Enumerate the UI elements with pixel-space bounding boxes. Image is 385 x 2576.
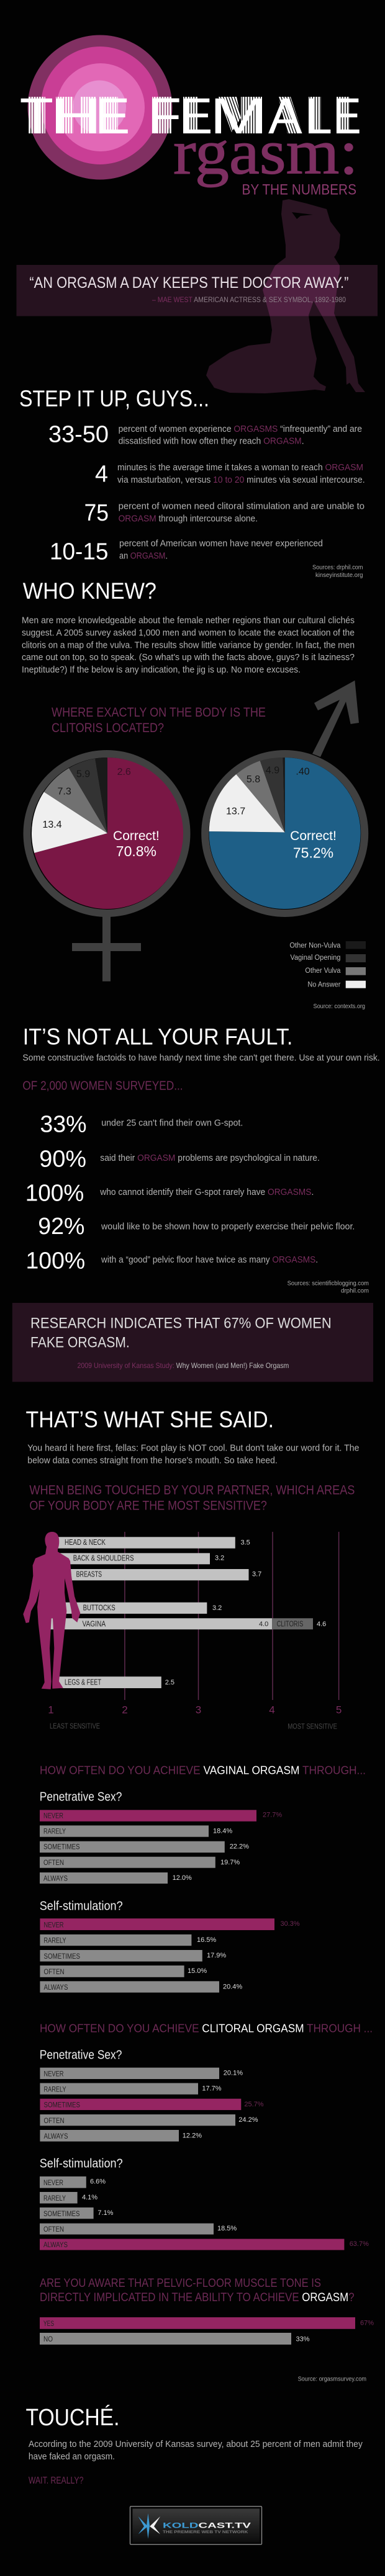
bar chart: clitoral self-stimulation: SOMETIMES xyxy=(43,2211,80,2218)
legend: pie charts: Other Non-Vulva xyxy=(289,942,341,950)
bar chart: vaginal self-stimulation: 20.4% xyxy=(223,1983,242,1990)
stat: 100 percent identify xyxy=(25,1181,314,1207)
axis numbers: 1 xyxy=(48,1704,54,1716)
bar chart: vaginal self-stimulation: 16.5% xyxy=(197,1936,216,1944)
axis captions: LEAST SENSITIVE xyxy=(50,1723,100,1730)
title: the female: A xyxy=(268,88,302,145)
bar chart: vaginal self-stimulation xyxy=(40,1900,300,1993)
paragraph: touche xyxy=(29,2440,363,2462)
bar chart: vaginal self-stimulation: NEVER xyxy=(43,1922,63,1930)
sources: fault section xyxy=(288,1280,369,1294)
heading: who knew: WHO KNEW? xyxy=(23,578,156,604)
bar chart: pelvic floor awareness: 67% xyxy=(360,2320,374,2327)
heading: sensitivity question xyxy=(29,1483,355,1513)
bar chart: pelvic floor awareness xyxy=(40,2317,374,2345)
panel: research callout: 2009 University of Kansas Study: Why Women (and Men!) Fake Orgasm xyxy=(77,1361,289,1370)
stat: 4: minutes is the average time it takes a woman to reach ORGASM xyxy=(117,463,363,473)
heading: sensitivity question: OF YOUR BODY ARE THE MOST SENSITIVE? xyxy=(29,1498,267,1513)
stat: 4: via masturbation, versus 10 to 20 minutes via sexual intercourse. xyxy=(117,475,365,485)
bar chart: clitoral penetrative: 12.2% xyxy=(183,2132,202,2139)
bar chart: pelvic floor awareness: YES xyxy=(43,2320,54,2328)
bar chart: clitoral penetrative: 24.2% xyxy=(238,2116,258,2124)
subtitle: by the numbers: BY THE NUMBERS xyxy=(242,181,356,199)
pie chart: men xyxy=(205,681,365,913)
paragraph: she said: You heard it here first, fellas: Foot play is NOT cool. But don't take our word for it. The xyxy=(27,1443,360,1453)
title: the female: E xyxy=(95,88,130,145)
panel: research callout xyxy=(12,1303,373,1382)
bar chart: clitoral self-stimulation: 7.1% xyxy=(97,2209,114,2217)
bar chart: vaginal penetrative: ALWAYS xyxy=(43,1875,68,1882)
bar chart: vaginal penetrative: 12.0% xyxy=(173,1874,192,1882)
bar chart: clitoral penetrative: OFTEN xyxy=(43,2118,65,2125)
bar chart: pelvic floor awareness: NO xyxy=(43,2336,53,2343)
bar chart: body sensitivity: CLITORIS xyxy=(277,1620,303,1629)
stat: 100 percent identify: 100% xyxy=(25,1181,84,1207)
heading: clitoral orgasm: HOW OFTEN DO YOU ACHIEVE CLITORAL ORGASM THROUGH ... xyxy=(40,2021,373,2035)
bar chart: clitoral self-stimulation: 4.1% xyxy=(82,2194,97,2201)
stat: 10-15: an ORGASM. xyxy=(119,552,168,561)
title: the female: T xyxy=(20,88,53,145)
title: the female: H xyxy=(50,88,102,145)
panel: research callout: FAKE ORGASM. xyxy=(30,1335,130,1351)
logo: koldcast tv: KOLD CAST.TV xyxy=(163,2521,251,2530)
sources: fault section: Sources: scientificblogging.com xyxy=(288,1280,369,1287)
stat: 92 percent: 92% xyxy=(38,1214,84,1240)
bar chart: clitoral penetrative: 25.7% xyxy=(244,2101,264,2108)
bar chart: vaginal penetrative: Penetrative Sex? xyxy=(40,1791,122,1804)
bar chart: vaginal penetrative: SOMETIMES xyxy=(43,1844,80,1851)
bar chart: clitoral penetrative: SOMETIMES xyxy=(43,2102,80,2109)
bar chart: body sensitivity: 3.5 xyxy=(241,1539,250,1546)
logo: koldcast tv: THE PREMIERE WEB TV NETWORK xyxy=(163,2531,248,2534)
title: the female: M xyxy=(210,88,268,145)
stat: 75: ORGASM through intercourse alone. xyxy=(119,514,258,524)
bar chart: body sensitivity: VAGINA xyxy=(82,1620,106,1629)
heading: pelvic floor question xyxy=(40,2277,355,2304)
bar chart: vaginal penetrative: 18.4% xyxy=(213,1827,232,1835)
stat: 100 percent identify: who cannot identify their G-spot rarely have ORGASMS. xyxy=(99,1187,314,1197)
pie chart: women: 5.9 xyxy=(76,769,90,780)
bar chart: clitoral penetrative: 17.7% xyxy=(202,2085,222,2093)
stat: 33-50: percent of women experience ORGASMS “infrequently” and are xyxy=(119,424,362,434)
axis numbers: 4 xyxy=(269,1704,275,1716)
legend: pie charts xyxy=(289,941,366,989)
bar chart: body sensitivity: 2.5 xyxy=(165,1679,174,1686)
stat: 10-15: 10-15 xyxy=(50,539,108,565)
bar chart: vaginal penetrative: 27.7% xyxy=(263,1811,282,1818)
bar chart: clitoral penetrative: 20.1% xyxy=(224,2069,243,2077)
stat: 10-15 xyxy=(50,539,323,565)
bar chart: vaginal self-stimulation: SOMETIMES xyxy=(43,1953,80,1961)
pie chart: women: Correct! xyxy=(113,829,160,843)
stat: 75: percent of women need clitoral stimulation and are unable to xyxy=(119,502,365,512)
bar chart: clitoral self-stimulation: 63.7% xyxy=(350,2240,369,2248)
heading: clitoris location question: WHERE EXACTLY ON THE BODY IS THE xyxy=(52,705,266,720)
bar chart: body sensitivity: LEGS & FEET xyxy=(65,1678,101,1687)
heading: not all your fault: IT’S NOT ALL YOUR FAULT. xyxy=(23,1024,292,1049)
panel: quote xyxy=(16,265,378,316)
pie chart: men: 5.8 xyxy=(247,774,260,785)
source: orgasm survey: Source: orgasmsurvey.com xyxy=(298,2375,366,2382)
title: the female: E xyxy=(179,88,212,145)
axis captions: MOST SENSITIVE xyxy=(288,1724,337,1731)
pie chart: women: 70.8% xyxy=(116,843,156,859)
axis numbers: 5 xyxy=(336,1704,342,1716)
bar chart: pelvic floor awareness: 33% xyxy=(296,2335,310,2343)
stat: 33-50 xyxy=(48,422,362,448)
stat: 33 percent: 33% xyxy=(40,1111,87,1137)
bar chart: body sensitivity xyxy=(23,1532,342,1731)
icon: concentric circles xyxy=(27,35,173,180)
bar chart: clitoral penetrative: Penetrative Sex? xyxy=(40,2048,122,2062)
axis numbers: 3 xyxy=(196,1704,201,1716)
bar chart: clitoral self-stimulation: 18.5% xyxy=(217,2225,237,2232)
bar chart: vaginal penetrative xyxy=(40,1791,282,1884)
bar chart: clitoral penetrative: RARELY xyxy=(43,2086,66,2093)
subheading: of 2000 women: OF 2,000 WOMEN SURVEYED... xyxy=(22,1080,183,1093)
bar chart: clitoral self-stimulation: RARELY xyxy=(43,2195,66,2203)
bar chart: vaginal self-stimulation: OFTEN xyxy=(43,1969,65,1976)
panel: research callout: RESEARCH INDICATES THAT 67% OF WOMEN xyxy=(30,1315,332,1332)
bar chart: vaginal self-stimulation: RARELY xyxy=(43,1938,66,1945)
stat: 4 xyxy=(95,462,365,488)
bar chart: clitoral self-stimulation xyxy=(40,2157,369,2250)
heading: clitoris location question xyxy=(52,705,266,735)
heading: pelvic floor question: ARE YOU AWARE THAT PELVIC-FLOOR MUSCLE TONE IS xyxy=(40,2277,321,2290)
pie chart: women: 7.3 xyxy=(57,787,71,797)
bar chart: body sensitivity: BREASTS xyxy=(76,1570,102,1579)
stat: 33-50: 33-50 xyxy=(48,422,109,448)
paragraph: touche: have faked an orgasm. xyxy=(29,2452,115,2462)
bar chart: body sensitivity: 3.7 xyxy=(252,1571,261,1578)
bar chart: body sensitivity: HEAD & NECK xyxy=(65,1538,106,1547)
bar chart: clitoral self-stimulation: OFTEN xyxy=(43,2226,64,2234)
stat: 75: 75 xyxy=(84,500,109,526)
sources: step it up: kinseyinstitute.org xyxy=(315,571,363,579)
axis numbers: 2 xyxy=(122,1704,128,1716)
heading: step it up: STEP IT UP, GUYS... xyxy=(19,386,209,411)
stat: 75 xyxy=(84,500,365,526)
bar chart: vaginal penetrative: 22.2% xyxy=(230,1843,249,1850)
bar chart: vaginal self-stimulation: ALWAYS xyxy=(43,1984,68,1992)
paragraph: she said: below data comes straight from the horse's mouth. So take heed. xyxy=(27,1456,278,1465)
bar chart: vaginal self-stimulation: 30.3% xyxy=(281,1920,300,1928)
heading: touche: TOUCHÉ. xyxy=(26,2404,119,2431)
logo: koldcast tv xyxy=(130,2507,262,2544)
bar chart: vaginal penetrative: 19.7% xyxy=(220,1859,240,1866)
stat: 90 percent: 90% xyxy=(39,1147,86,1173)
stat: 33 percent xyxy=(40,1111,243,1137)
heading: clitoris location question: CLITORIS LOCATED? xyxy=(52,721,164,735)
intro text: factoids: Some constructive factoids to have handy next time she can't get there. Use at your own risk. xyxy=(22,1053,380,1063)
bar chart: clitoral penetrative xyxy=(40,2048,264,2142)
bar chart: clitoral penetrative: ALWAYS xyxy=(43,2133,68,2140)
source: contexts: Source: contexts.org xyxy=(313,1003,365,1010)
stat: 10-15: percent of American women have never experienced xyxy=(119,539,323,549)
stat: 4: 4 xyxy=(95,462,108,488)
pie chart: men: Correct! xyxy=(290,829,337,843)
heading: vaginal orgasm: HOW OFTEN DO YOU ACHIEVE VAGINAL ORGASM THROUGH... xyxy=(40,1763,366,1776)
pie chart: men: 75.2% xyxy=(293,845,333,861)
paragraph: who knew: Men are more knowledgeable about the female nether regions than our cultural clichés xyxy=(22,615,355,625)
pie chart: women: 13.4 xyxy=(42,820,62,830)
stat: 92 percent xyxy=(38,1214,355,1240)
title: the female: E xyxy=(333,88,361,145)
title: the female xyxy=(20,88,361,145)
bar chart: body sensitivity: 3.2 xyxy=(215,1555,224,1562)
pie chart: men: 13.7 xyxy=(226,807,245,817)
paragraph: touche: According to the 2009 University of Kansas survey, about 25 percent of men admit they xyxy=(29,2440,363,2449)
sources: step it up xyxy=(312,564,363,579)
stat: 90 percent xyxy=(39,1147,320,1173)
pie chart: women: 2.6 xyxy=(117,767,131,777)
title: the female: F xyxy=(148,88,181,145)
stat: 92 percent: would like to be shown how to properly exercise their pelvic floor. xyxy=(101,1222,355,1232)
bar chart: vaginal penetrative: NEVER xyxy=(43,1813,63,1820)
bar chart: clitoral self-stimulation: ALWAYS xyxy=(43,2242,68,2249)
stat: 100 percent pelvic floor: 100% xyxy=(26,1248,85,1274)
stat: 33-50: dissatisfied with how often they reach ORGASM. xyxy=(119,437,304,447)
legend: pie charts: Vaginal Opening xyxy=(290,954,340,962)
bar chart: clitoral self-stimulation: 6.6% xyxy=(90,2178,106,2186)
title: the female: L xyxy=(305,88,332,145)
bar chart: clitoral penetrative: NEVER xyxy=(43,2071,63,2078)
quote text: “AN ORGASM A DAY KEEPS THE DOCTOR AWAY.” xyxy=(29,274,348,292)
paragraph: she said xyxy=(27,1443,360,1465)
bar chart: clitoral self-stimulation: NEVER xyxy=(43,2180,63,2187)
paragraph: who knew: Ineptitude?) If the below is any indication, the jig is up. No more excuses. xyxy=(22,665,301,675)
legend: pie charts: Other Vulva xyxy=(305,967,341,975)
axis numbers xyxy=(48,1704,342,1716)
legend: pie charts: No Answer xyxy=(307,982,341,989)
stat: 90 percent: said their ORGASM problems are psychological in nature. xyxy=(100,1153,320,1163)
quote attribution: – MAE WEST AMERICAN ACTRESS & SEX SYMBOL, 1892-1980 xyxy=(152,295,346,304)
bar chart: body sensitivity: BACK & SHOULDERS xyxy=(73,1554,134,1563)
paragraph: who knew xyxy=(22,615,355,675)
bar chart: vaginal self-stimulation: Self-stimulation? xyxy=(40,1900,123,1913)
paragraph: who knew: clitoris on a map of the vulva. The results show little variance by gender. In fact, the men xyxy=(22,640,355,650)
bar chart: body sensitivity: BUTTOCKS xyxy=(83,1604,116,1612)
bar chart: body sensitivity: 3.2 xyxy=(212,1604,222,1612)
icon: kneeling woman silhouette xyxy=(206,199,365,393)
paragraph: who knew: came out on top, so to speak. (So what's up with the facts above, guys? Is it laziness? xyxy=(22,653,355,663)
bar chart: vaginal self-stimulation: 17.9% xyxy=(207,1952,226,1959)
stat: 100 percent pelvic floor: with a “good” pelvic floor have twice as many ORGASMS. xyxy=(101,1255,318,1265)
sources: step it up: Sources: drphil.com xyxy=(312,564,363,571)
axis captions xyxy=(50,1723,337,1731)
title: rgasm: rgasm: xyxy=(173,117,358,187)
callout: wait really: WAIT. REALLY? xyxy=(29,2475,84,2486)
icon: female body silhouette xyxy=(23,1532,80,1689)
bar chart: clitoral self-stimulation: Self-stimulation? xyxy=(40,2157,123,2171)
pie chart: men: .40 xyxy=(296,766,310,777)
bar chart: body sensitivity: 4.0 xyxy=(259,1621,268,1628)
bar chart: body sensitivity: 4.6 xyxy=(317,1621,326,1628)
heading: pelvic floor question: DIRECTLY IMPLICATED IN THE ABILITY TO ACHIEVE ORGASM? xyxy=(40,2291,355,2304)
sources: fault section: drphil.com xyxy=(341,1287,369,1294)
paragraph: who knew: suggest. A 2005 survey asked 1,000 men and women to locate the exact location of the xyxy=(22,628,355,638)
pie chart: men: 4.9 xyxy=(266,766,279,776)
bar chart: vaginal self-stimulation: 15.0% xyxy=(188,1967,207,1975)
heading: that's what she said: THAT’S WHAT SHE SAID. xyxy=(26,1407,274,1433)
bar chart: vaginal penetrative: RARELY xyxy=(43,1828,66,1836)
bar chart: vaginal penetrative: OFTEN xyxy=(43,1859,64,1867)
pie chart: women xyxy=(27,754,186,982)
stat: 100 percent pelvic floor xyxy=(26,1248,318,1274)
stat: 33 percent: under 25 can't find their own G-spot. xyxy=(101,1118,243,1128)
